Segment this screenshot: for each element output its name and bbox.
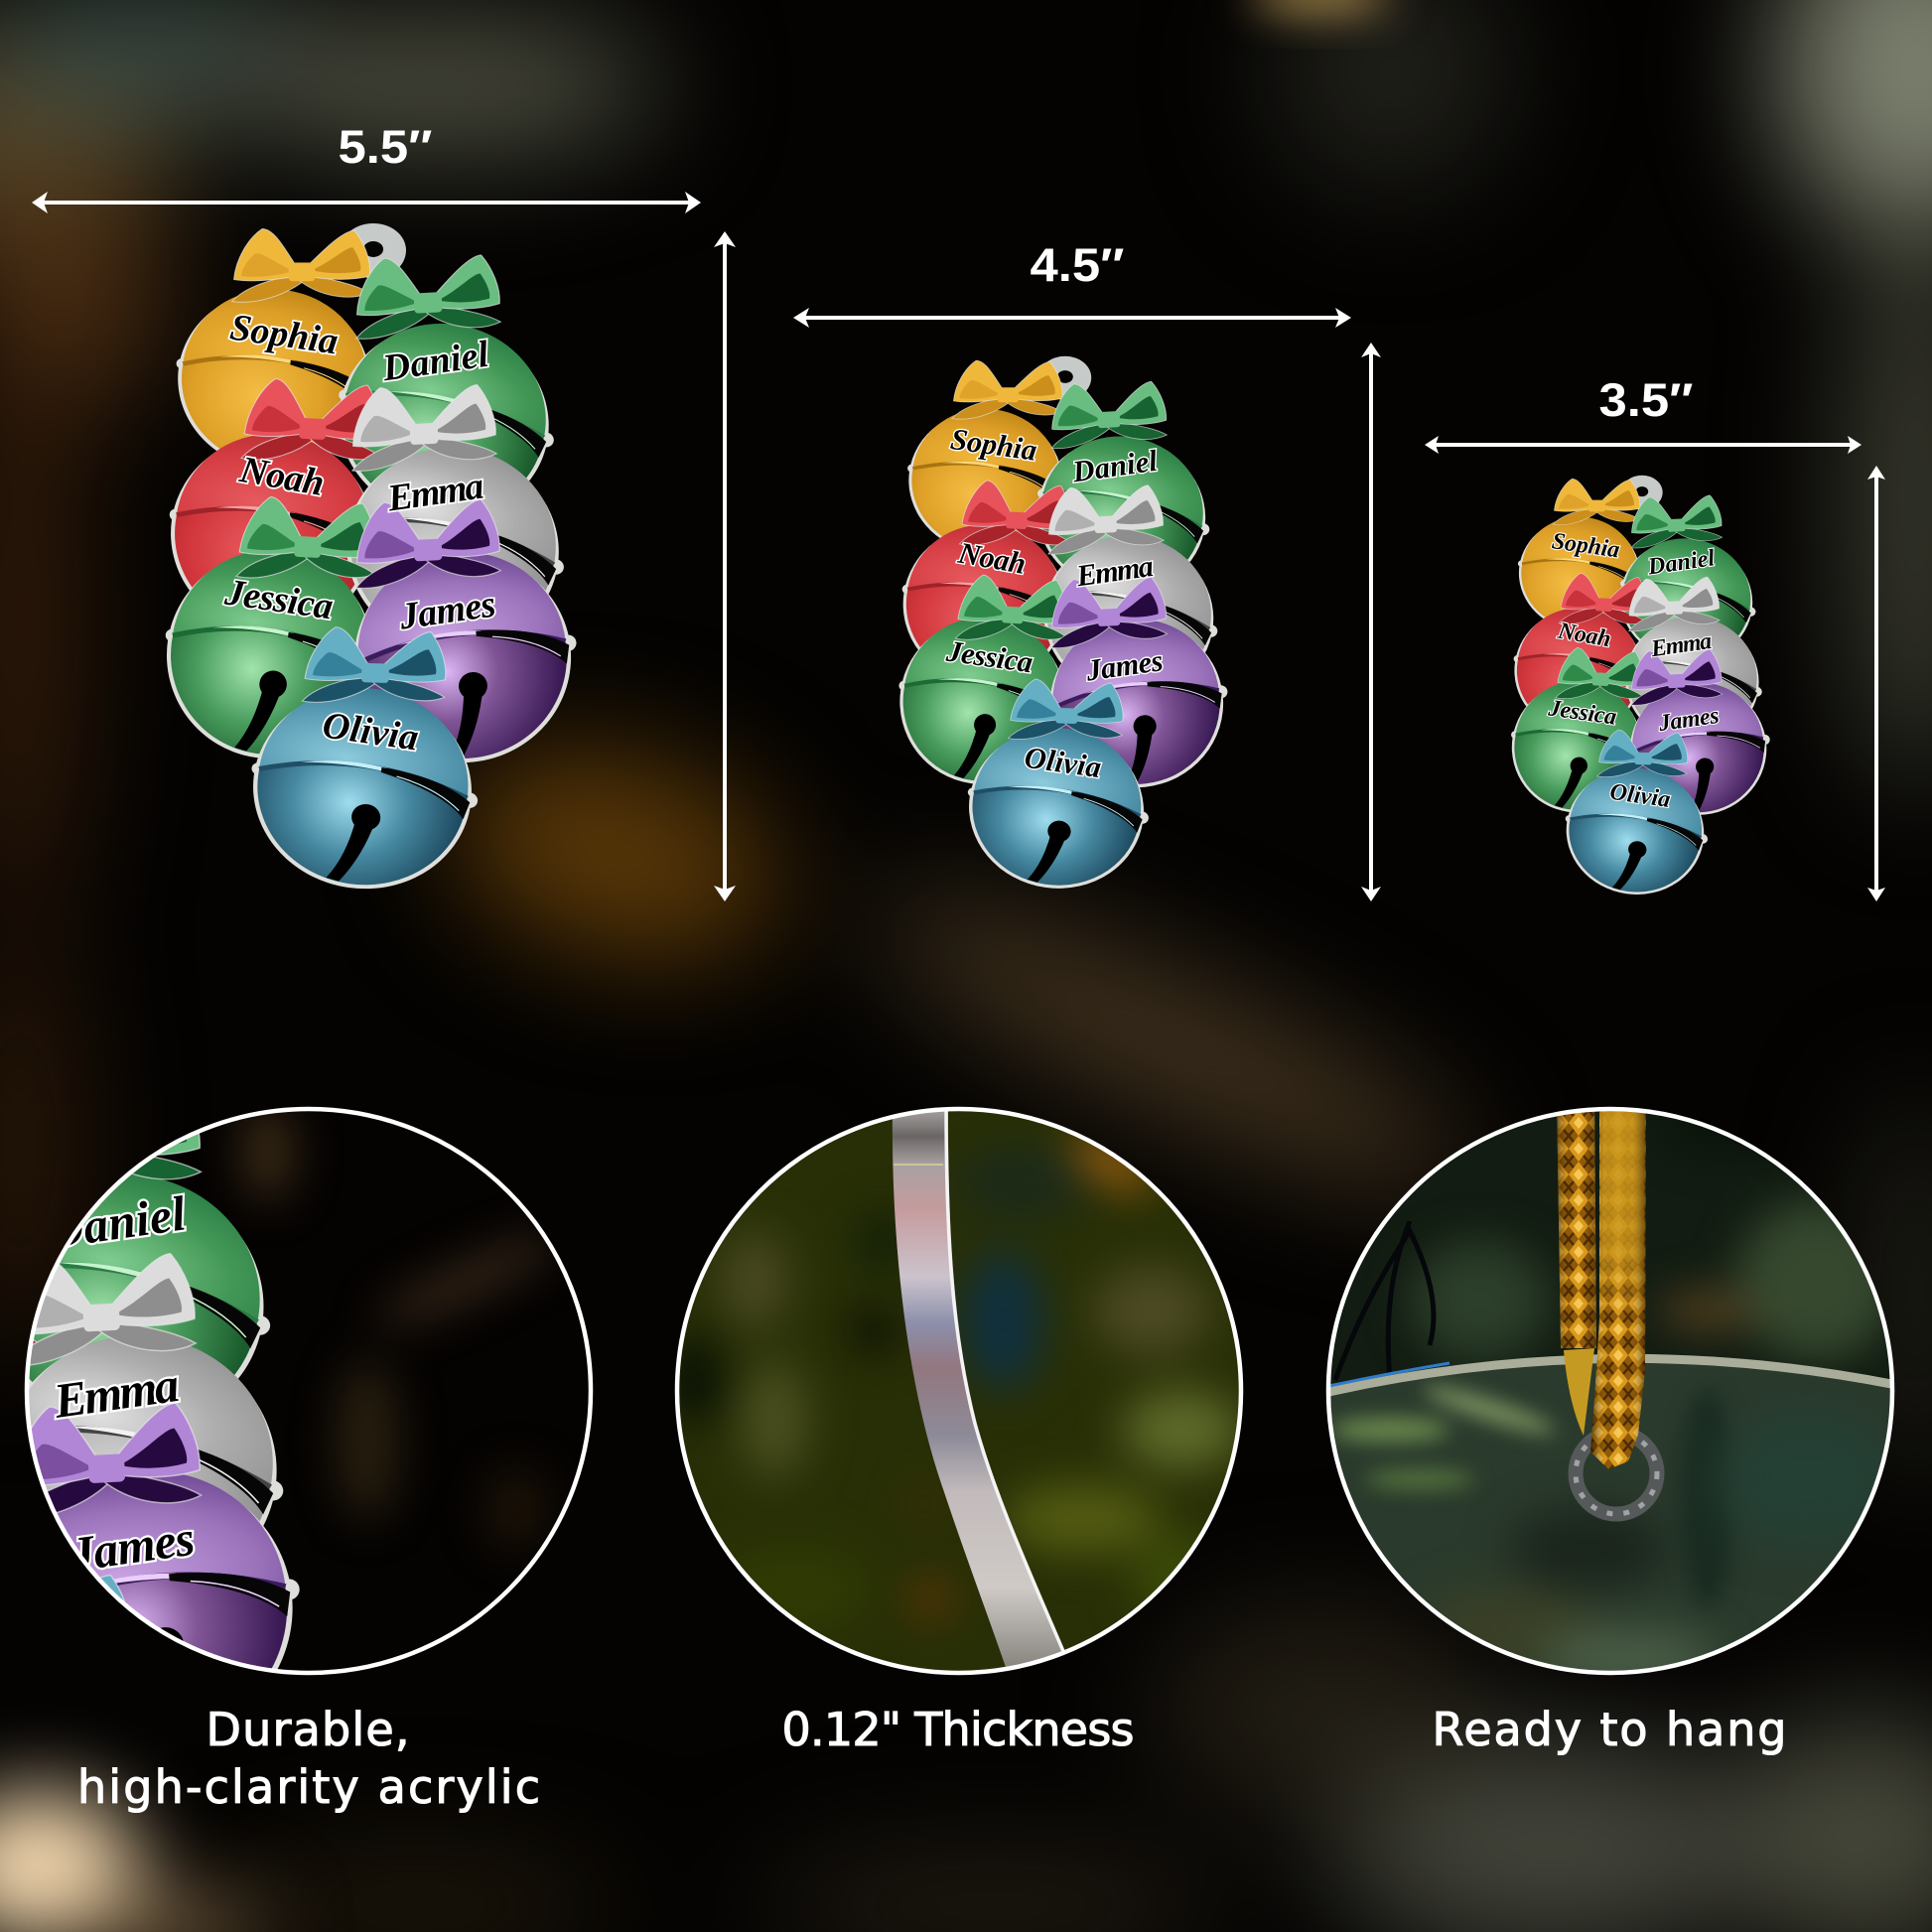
detail circle: thickness close-up: [665, 1102, 1251, 1688]
names on large ornament: Noah: [236, 449, 328, 504]
arrow: height: [1361, 343, 1381, 901]
names on medium ornament: Olivia: [1023, 741, 1103, 784]
names on small ornament: Jessica: [1546, 695, 1618, 731]
size label 5.5: 5.5″: [338, 120, 433, 173]
names on medium ornament: Jessica: [943, 633, 1035, 679]
gold cord: [1557, 1092, 1646, 1469]
names on small ornament: Daniel: [1645, 545, 1717, 581]
names on small ornament: Noah: [1555, 618, 1613, 652]
caption: durable acrylic: Durable,: [207, 1703, 409, 1756]
caption: ready to hang: Ready to hang: [1432, 1703, 1787, 1756]
names on small ornament: Olivia: [1608, 779, 1672, 813]
names on large ornament: Emma: [384, 465, 486, 520]
background branches: [1335, 1221, 1434, 1380]
names on small ornament: James: [1656, 703, 1721, 737]
names on small ornament: [1546, 528, 1721, 813]
detail circle: acrylic close-up: [24, 1106, 594, 1676]
ornament: small: [1501, 476, 1777, 903]
detail circle: acrylic close-up: Emma: [50, 1357, 183, 1429]
names on large ornament: Sophia: [227, 307, 341, 362]
names on large ornament: Olivia: [320, 704, 421, 759]
arrow: width: [1425, 436, 1862, 454]
size label 4.5: 4.5″: [1031, 238, 1124, 291]
names on medium ornament: Sophia: [948, 422, 1039, 468]
names on large ornament: [221, 307, 498, 759]
names on medium ornament: Emma: [1073, 549, 1156, 593]
names on medium ornament: Noah: [955, 535, 1029, 581]
names on medium ornament: Daniel: [1069, 444, 1160, 488]
acrylic edge: [1324, 1358, 1896, 1393]
ornament: medium: [887, 356, 1237, 900]
detail circle: ready to hang close-up: [1320, 1092, 1906, 1688]
dimension: 3.5 inch: [1425, 373, 1885, 901]
detail circle: acrylic close-up: Daniel: [44, 1185, 189, 1259]
arrow: height: [714, 231, 736, 901]
arrow: width: [793, 308, 1351, 328]
dimension: 5.5 inch: [32, 120, 736, 901]
caption: durable acrylic: high-clarity acrylic: [77, 1760, 540, 1814]
names on large ornament: Jessica: [221, 571, 336, 627]
names on large ornament: James: [396, 583, 498, 638]
names on medium ornament: [943, 422, 1165, 784]
ornament: large: [150, 223, 588, 903]
hanging ring: [1576, 1433, 1657, 1514]
names on small ornament: Emma: [1649, 628, 1714, 662]
names on small ornament: Sophia: [1550, 528, 1621, 564]
names on medium ornament: James: [1083, 643, 1165, 688]
size label 3.5: 3.5″: [1598, 373, 1694, 426]
caption: durable acrylic: [77, 1703, 540, 1814]
caption: thickness: 0.12" Thickness: [782, 1703, 1134, 1756]
dimension: 4.5 inch: [793, 238, 1381, 901]
arrow: height: [1867, 466, 1885, 901]
detail circle: acrylic close-up: James: [66, 1511, 198, 1583]
names on large ornament: Daniel: [379, 334, 491, 389]
arrow: width: [32, 192, 701, 213]
